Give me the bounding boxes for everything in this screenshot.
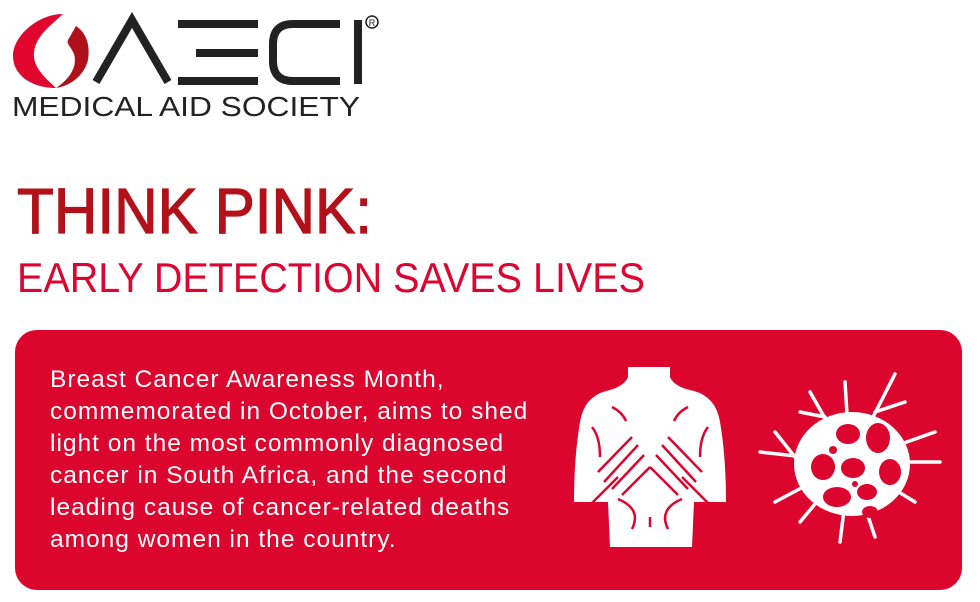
logo <box>12 12 379 122</box>
text block: light on the most commonly diagnosed <box>50 430 504 457</box>
panel: awareness info <box>15 330 962 590</box>
title: THINK PINK: <box>17 175 372 247</box>
title <box>17 175 645 301</box>
text block: Breast Cancer Awareness Month, <box>50 366 445 393</box>
text block: cancer in South Africa, and the second <box>50 462 508 489</box>
text block <box>50 366 528 553</box>
icon: cancer cell <box>758 372 942 544</box>
text block: among women in the country. <box>50 526 397 553</box>
logo wordmark AECI: R <box>369 18 376 28</box>
logo wordmark AECI <box>96 16 378 84</box>
text block: leading cause of cancer-related deaths <box>50 494 510 521</box>
icon: torso with hands <box>574 367 726 547</box>
text block: commemorated in October, aims to shed <box>50 398 528 425</box>
icon: red drop <box>13 14 89 88</box>
logo subtitle: MEDICAL AID SOCIETY <box>12 91 360 122</box>
subtitle: EARLY DETECTION SAVES LIVES <box>17 254 645 301</box>
